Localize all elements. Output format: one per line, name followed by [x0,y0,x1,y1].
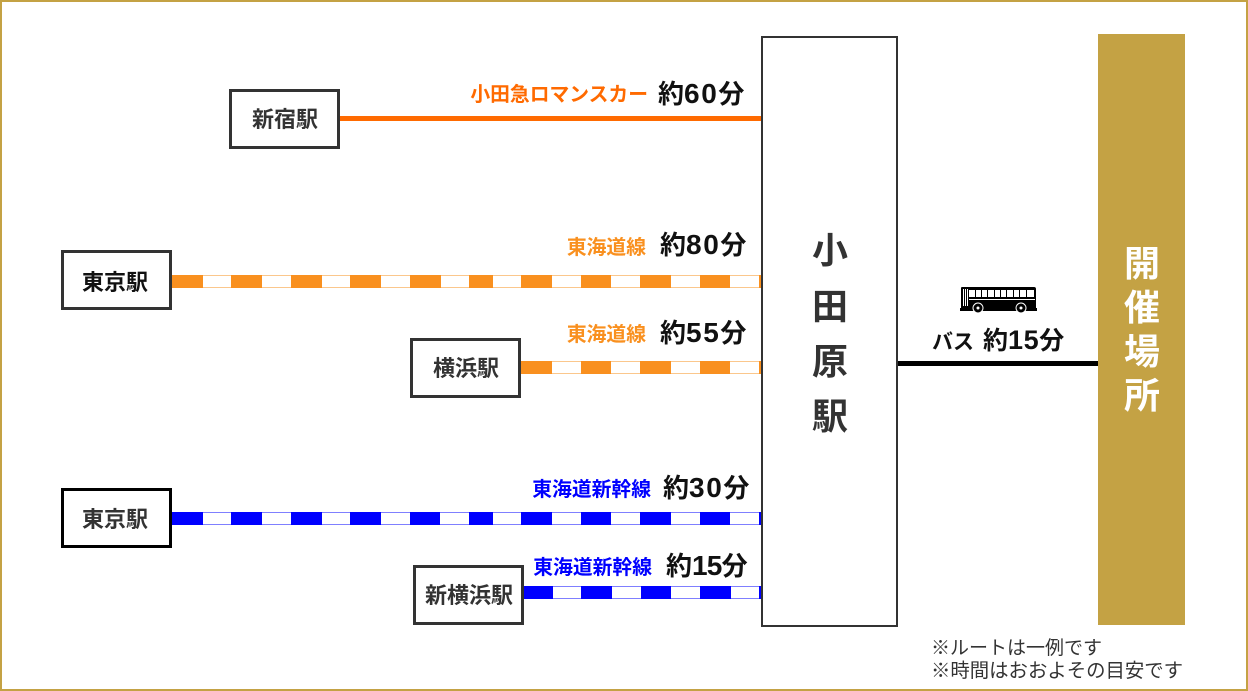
label: Tokaido line 80 minutes [567,229,746,260]
label: Tokaido line 80 minutes: 東海道線 [567,237,646,259]
station: Tokyo (Shinkansen) [62,490,170,546]
station: Tokyo (Shinkansen): 東京駅 [82,507,148,532]
notes: ※ルートは一例です [931,637,1102,659]
venue: 催 [1124,287,1160,328]
line: bus route [898,361,1098,366]
line: Tokaido from Yokohama [521,361,761,374]
label: bus 15 minutes: バス [932,331,974,354]
line: Tokaido from Tokyo [172,275,761,288]
label: Tokaido Shinkansen 30 minutes [532,472,749,503]
station: Odawara [762,37,897,626]
label: Odakyu Romancecar 60 minutes [470,78,744,109]
label: Tokaido Shinkansen 30 minutes: 東海道新幹線 [532,479,651,501]
label: Tokaido line 55 minutes: 東海道線 [567,324,646,346]
label: Tokaido Shinkansen 15 minutes: 約15分 [666,550,748,581]
station: Tokyo (Tokaido): 東京駅 [82,270,148,295]
line: Shinkansen from Tokyo [172,512,761,525]
station: Yokohama [412,340,520,396]
label: Tokaido Shinkansen 15 minutes [533,550,748,581]
station: Shin-Yokohama: 新横浜駅 [425,583,513,608]
station: Odawara: 駅 [812,396,848,437]
label: Tokaido line 55 minutes: 約55分 [660,317,746,348]
label: bus 15 minutes [932,325,1064,355]
label: Odakyu Romancecar 60 minutes: 小田急ロマンスカー [470,83,648,106]
label: bus 15 minutes: 約15分 [983,325,1064,355]
label: Tokaido Shinkansen 30 minutes: 約30分 [663,472,749,503]
station: Odawara: 田 [812,286,848,327]
station: Shinjuku: 新宿駅 [252,107,318,132]
station: Tokyo (Tokaido) [62,252,170,308]
venue: 開 [1124,243,1160,284]
icon: bus [960,287,1037,313]
notes: ※時間はおおよその目安です [931,660,1183,682]
venue: 所 [1124,375,1160,416]
notes [931,637,1183,682]
label: Odakyu Romancecar 60 minutes: 約60分 [658,78,744,109]
station: Shinjuku [230,90,338,148]
label: Tokaido line 80 minutes: 約80分 [660,229,746,260]
venue: 場 [1124,331,1160,372]
station: Shin-Yokohama [414,566,522,624]
label: Tokaido Shinkansen 15 minutes: 東海道新幹線 [533,557,652,579]
line: Odakyu Romancecar [340,116,761,121]
label: Tokaido line 55 minutes [567,317,746,348]
station: Odawara: 原 [812,341,848,382]
line: Shinkansen from Shin-Yokohama [524,586,761,599]
station: Odawara: 小 [812,230,848,271]
station: Yokohama: 横浜駅 [433,356,499,381]
venue [1098,34,1185,625]
